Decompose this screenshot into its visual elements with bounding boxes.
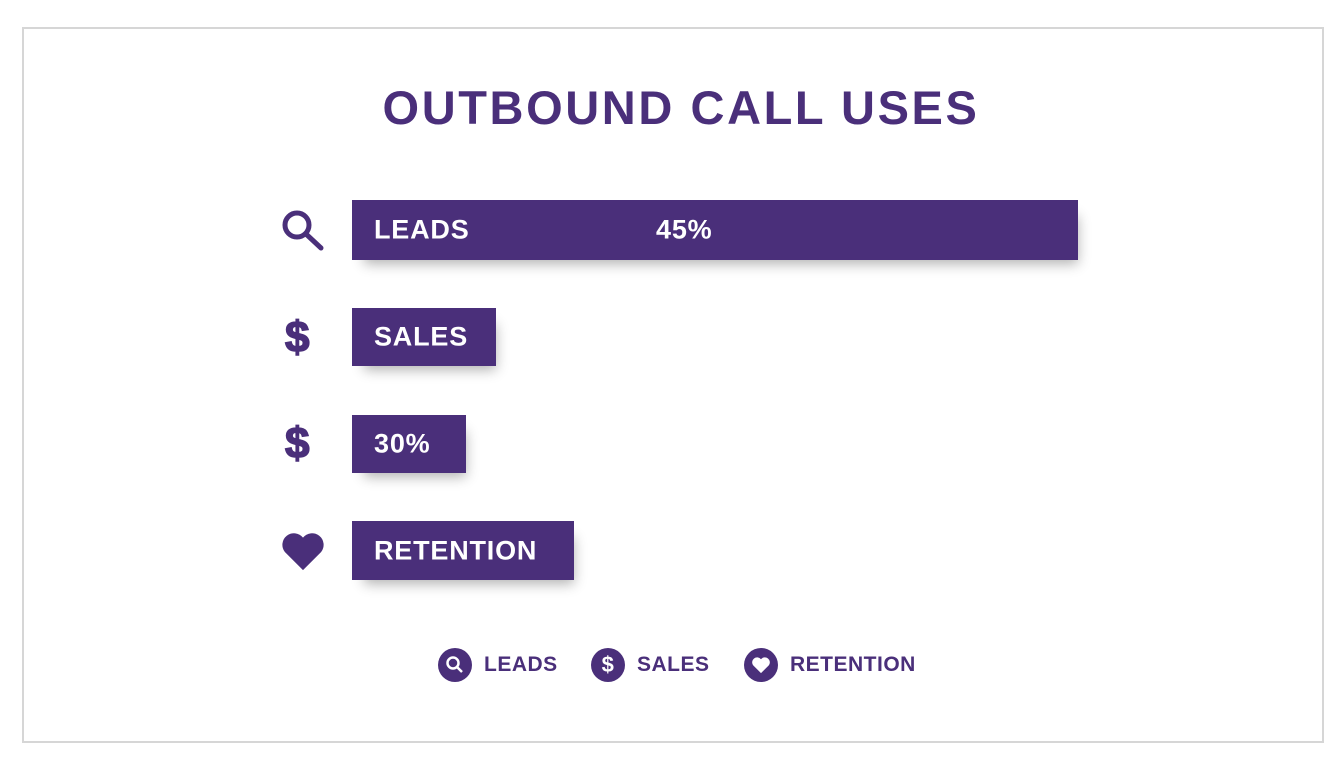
- bar: leads: [352, 200, 1078, 260]
- bar: sales: [352, 308, 496, 366]
- bar: 30%: 30%: [374, 428, 430, 458]
- icon: dollar 2: $: [285, 419, 309, 468]
- icon: heart: [282, 533, 324, 570]
- icon: magnifier: [282, 210, 324, 250]
- legend: leads: [438, 648, 558, 682]
- icon: dollar: $: [285, 313, 309, 362]
- legend: sales: [591, 648, 710, 682]
- bar: 30%: [352, 415, 466, 473]
- bar: retention: [352, 521, 574, 580]
- legend: retention: RETENTION: [790, 653, 916, 676]
- bar: leads: LEADS: [374, 214, 470, 244]
- bar: leads: 45%: [656, 214, 712, 244]
- legend: retention: [744, 648, 916, 682]
- bar: sales: SALES: [374, 322, 468, 352]
- legend: leads: LEADS: [484, 653, 558, 676]
- legend: sales: SALES: [637, 653, 710, 676]
- bar: retention: RETENTION: [374, 535, 537, 565]
- title: OUTBOUND CALL USES: [383, 81, 979, 134]
- legend: sales: $: [602, 652, 614, 677]
